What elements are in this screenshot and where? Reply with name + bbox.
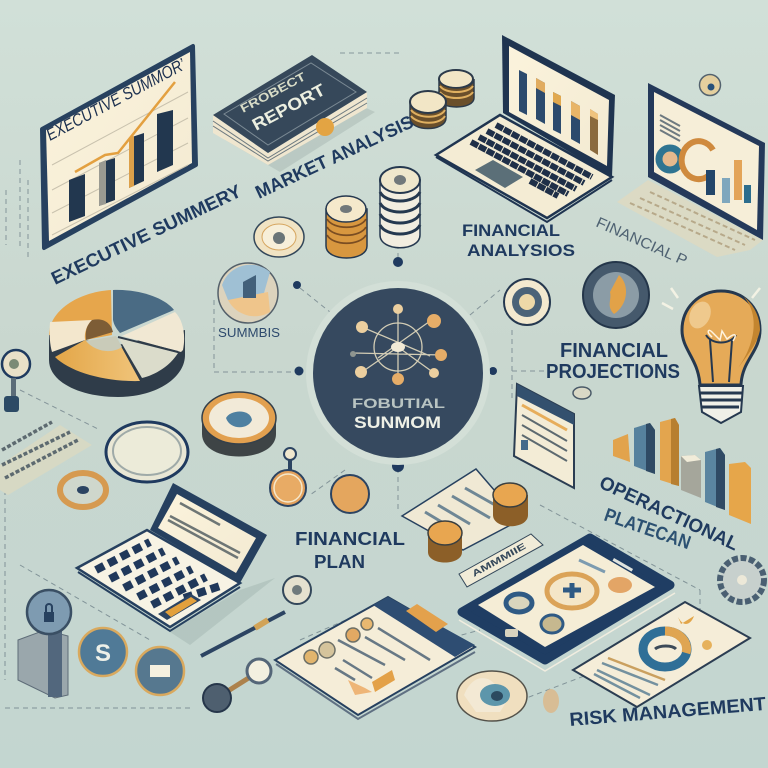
icon: lens ring: [106, 422, 188, 482]
label: financial projections: [546, 340, 680, 383]
icon: small medallion top right: [700, 74, 720, 96]
bars: [69, 110, 173, 222]
icon: padlock magnifier: [18, 590, 71, 698]
icon: gear: [720, 558, 764, 602]
icon: coin stack gold: [326, 196, 367, 258]
list lines: [335, 628, 430, 680]
panel: laptop with dashboard: [617, 83, 765, 257]
icon: pen: [201, 612, 285, 656]
clip: [406, 604, 448, 632]
panel: project report book: [213, 55, 375, 172]
panel: document with coins: [402, 469, 528, 562]
label: financial plan: [295, 529, 405, 572]
cover text: FROBECT: [238, 69, 309, 116]
node dots: [293, 257, 497, 472]
orange key: [158, 594, 201, 620]
dashboard lines: [660, 115, 680, 141]
icon: gold badge: [331, 475, 369, 513]
panel: tablet: [459, 538, 675, 671]
label: financial analysios: FINANCIAL: [462, 221, 560, 240]
icon: light bulb: [662, 288, 760, 423]
icon: round badge s: S: [95, 640, 111, 667]
panel: clipboard checklist: [275, 597, 475, 719]
icon: small gauge badge: [283, 576, 311, 604]
panel: pie chart: [49, 290, 185, 397]
bar chart: operational plan: [613, 418, 751, 524]
label: summbis: SUMMBIS: [218, 326, 280, 340]
icon: medallion blue gold: [583, 262, 649, 328]
icon: round badge s: [79, 628, 127, 676]
label: operactional: OPERACTIONAL: [596, 472, 742, 556]
icon: gold ring: [60, 473, 106, 507]
list circles: [304, 618, 373, 664]
mini bars: [706, 160, 751, 203]
donut: [659, 148, 681, 170]
trend line: [75, 82, 175, 172]
top bits: [579, 560, 605, 572]
icon: compass puck: [202, 392, 276, 456]
icon: medallion navy: [504, 279, 550, 325]
hub title: FOBUTIAL: [352, 395, 446, 411]
label: financial projections: FINANCIAL: [560, 340, 668, 362]
label tag: [459, 534, 543, 587]
label tag: AMMMIIE: [470, 541, 527, 579]
laptop base: [436, 115, 612, 218]
coin: [428, 521, 462, 562]
icon: eye medallion: [457, 671, 527, 721]
lower ring: [541, 615, 563, 633]
icon: stacked coins top: [410, 70, 474, 128]
hub subtitle: SUNMOM: [354, 413, 441, 432]
gauge: [682, 141, 713, 179]
icon: key medallion left: [2, 350, 30, 412]
central ring: [547, 574, 597, 608]
chart lines: [594, 663, 658, 698]
label: market analysis: MARKET ANALYSIS: [252, 111, 417, 203]
coin: [493, 483, 528, 526]
keypad: [96, 542, 220, 605]
icon: round badge shield: [136, 647, 184, 695]
donut: [643, 631, 687, 667]
icon: coin stack navy: [380, 167, 420, 248]
icon: scrap: [543, 689, 559, 713]
icon: tiny gauge: [573, 387, 591, 399]
panel: report sheet: [573, 602, 750, 707]
panel: calculator: [77, 483, 275, 645]
panel: planning document: [514, 384, 574, 488]
trackpad: [475, 160, 523, 188]
panel: executive summary chart board: [42, 46, 196, 248]
label: financial plan: PLAN: [314, 552, 365, 572]
right tile: [608, 577, 632, 593]
orange wedge: [348, 680, 372, 695]
panel: central hub: [306, 281, 490, 465]
label: faded financial plan: FINANCIAL P: [593, 214, 690, 270]
label: risk management: RISK MANAGEMENT: [569, 694, 767, 731]
label: financial analysios: ANALYSIOS: [467, 241, 575, 260]
label: financial projections: PROJECTIONS: [546, 361, 680, 383]
screen bars: [519, 70, 598, 155]
network icon: [350, 304, 447, 385]
panel: small document left: [0, 422, 92, 495]
panel: project report book: REPORT: [249, 80, 329, 135]
panel: laptop with bar chart: [436, 35, 615, 222]
icon: plate medallion: [254, 217, 304, 257]
label: executive summery: EXECUTIVE SUMMERY: [48, 180, 245, 289]
icon: magnifier key: [203, 659, 271, 712]
icon: pin badge: [270, 448, 306, 506]
board title: EXECUTIVE SUMMOR’: [43, 55, 189, 145]
label: plateacn: PLATECAN: [601, 505, 693, 554]
bookmark seal: [316, 118, 334, 136]
icon: summary dial: [218, 263, 278, 323]
accent glyphs: [678, 616, 694, 624]
left ring: [506, 594, 532, 612]
connector lines: [5, 53, 700, 710]
label: financial plan: FINANCIAL: [295, 529, 405, 549]
bulb rays: [662, 288, 760, 309]
keyboard: [471, 125, 592, 196]
label: financial analysios: [462, 221, 575, 260]
